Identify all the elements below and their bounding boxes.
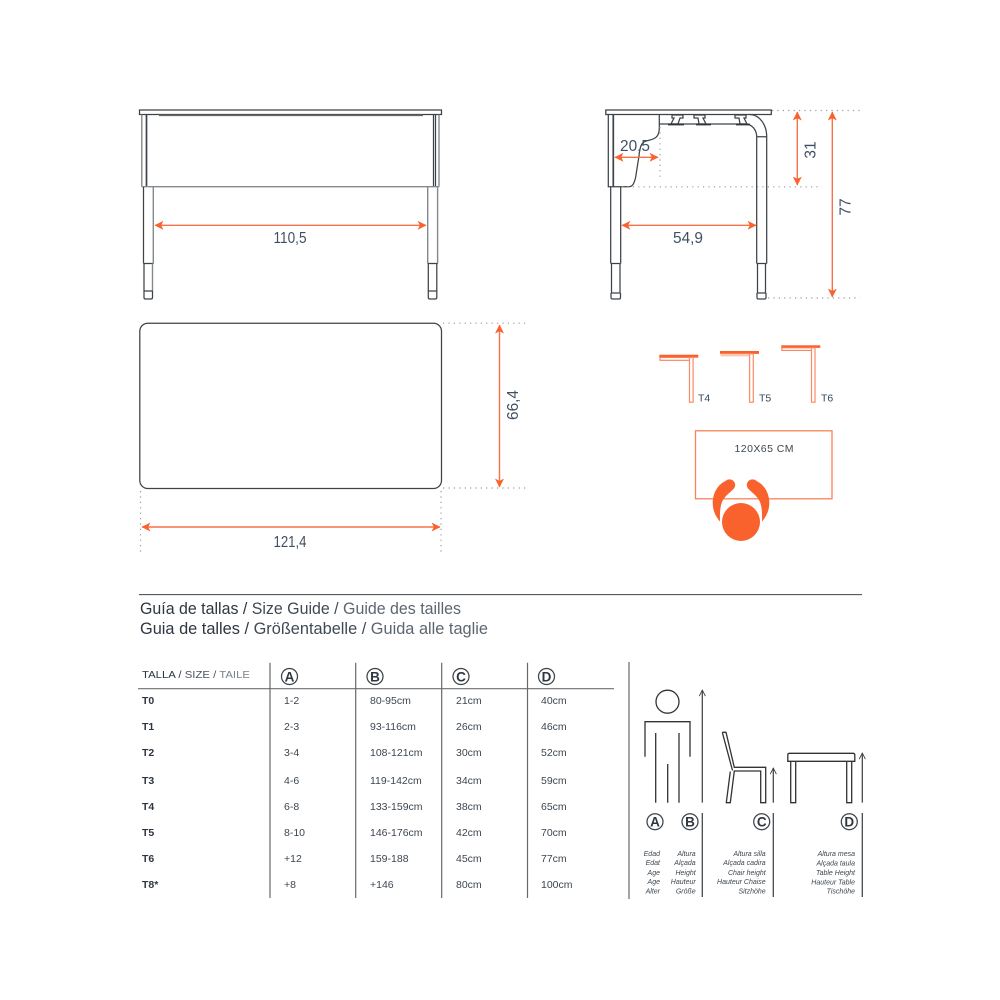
- side view of desk: 77: [838, 198, 854, 216]
- legend captions: Sitzhöhe: [738, 888, 766, 896]
- legend captions: Age: [647, 870, 660, 877]
- legend captions: Edad: [644, 851, 661, 858]
- letter badges: A: [650, 814, 660, 830]
- top view of desk: 66,4: [505, 390, 522, 420]
- legend captions: Altura silla: [732, 851, 766, 858]
- side view of desk: 31: [802, 141, 820, 159]
- legend captions: [644, 851, 856, 896]
- legend captions: Alçada cadira: [722, 860, 766, 867]
- legend captions: Hauteur Table: [811, 880, 855, 886]
- clamps: [668, 115, 750, 124]
- legend captions: Alçada: [673, 860, 696, 867]
- letter badges: B: [685, 814, 695, 830]
- table rows: 46cm: [541, 721, 567, 733]
- front view of desk: 110,5: [274, 230, 306, 247]
- table rows: 1-2: [284, 695, 299, 707]
- table rows: T8*: [142, 879, 159, 891]
- table rows: 4-6: [284, 775, 299, 787]
- table rows: 3-4: [284, 747, 299, 759]
- legend captions: Alter: [645, 888, 661, 896]
- orange desk size profiles T4 T5 T6: T5: [759, 392, 771, 404]
- icon: chair: [722, 732, 766, 803]
- table rows: 159-188: [370, 853, 409, 865]
- letter badges: D: [844, 814, 854, 830]
- table rows: 6-8: [284, 801, 299, 813]
- table rows: 93-116cm: [370, 721, 416, 733]
- arrow: chair height: [772, 768, 774, 803]
- letter badges: C: [757, 814, 767, 830]
- table rows: 77cm: [541, 853, 567, 865]
- table rows: +8: [284, 879, 296, 891]
- table rows: 52cm: [541, 747, 567, 759]
- table rows: T0: [142, 695, 154, 707]
- size table: [138, 663, 614, 898]
- size guide heading: [139, 595, 862, 638]
- desk footprint with seated user: 120X65 CM: [734, 443, 794, 455]
- table rows: 119-142cm: [370, 775, 422, 787]
- table header: [142, 668, 554, 684]
- measurement legend: [629, 662, 862, 899]
- front view of desk: [140, 110, 442, 299]
- table rows: 38cm: [456, 801, 482, 813]
- table rows: 2-3: [284, 721, 299, 733]
- legend captions: Table Height: [816, 870, 856, 877]
- table header: TALLA / SIZE / TAILE: [142, 669, 250, 681]
- arrow: table height: [861, 753, 863, 803]
- size guide heading: Guia de talles / Größentabelle / Guida alle taglie: [140, 620, 488, 638]
- legend captions: Altura: [676, 851, 696, 858]
- table rows: T2: [142, 747, 154, 759]
- side view of desk: [606, 110, 860, 299]
- legend captions: Alçada taula: [815, 860, 855, 868]
- orange desk size profiles T4 T5 T6: [659, 345, 833, 404]
- table rows: 80cm: [456, 879, 482, 891]
- letter badges: [647, 814, 857, 830]
- top view of desk: [140, 323, 528, 555]
- size guide heading: Guía de tallas / Size Guide / Guide des tailles: [140, 600, 461, 618]
- table rows: 40cm: [541, 695, 567, 707]
- legend captions: Größe: [676, 888, 696, 896]
- legend captions: Hauteur: [671, 879, 696, 886]
- table rows: 100cm: [541, 879, 573, 891]
- table header: C: [456, 669, 466, 684]
- table rows: +12: [284, 853, 302, 865]
- table rows: T4: [142, 801, 154, 813]
- table rows: 30cm: [456, 747, 482, 759]
- table rows: 34cm: [456, 775, 482, 787]
- table rows: 59cm: [541, 775, 567, 787]
- table rows: T5: [142, 827, 154, 839]
- table rows: 108-121cm: [370, 747, 423, 759]
- top view of desk: 121,4: [274, 534, 307, 551]
- side view of desk: 54,9: [673, 230, 703, 247]
- icon: person: [645, 690, 690, 803]
- arrow: height: [701, 690, 703, 803]
- legend captions: Altura mesa: [817, 851, 855, 858]
- table header: D: [542, 669, 552, 684]
- desk footprint with seated user: [696, 431, 832, 541]
- table rows: 8-10: [284, 827, 305, 839]
- table rows: T6: [142, 853, 154, 865]
- table rows: +146: [370, 879, 394, 891]
- orange desk size profiles T4 T5 T6: T6: [821, 392, 833, 404]
- legend captions: Edat: [646, 860, 661, 867]
- table rows: 45cm: [456, 853, 482, 865]
- table rows: 21cm: [456, 695, 482, 707]
- side view of desk: 20,5: [620, 138, 650, 155]
- legend captions: Hauteur Chaise: [717, 879, 766, 886]
- icon: person from above: [713, 479, 769, 541]
- icon: table: [788, 753, 855, 803]
- table rows: 146-176cm: [370, 827, 423, 839]
- table rows: 133-159cm: [370, 801, 423, 813]
- legend captions: Age: [647, 879, 660, 886]
- orange desk size profiles T4 T5 T6: T4: [698, 392, 710, 404]
- table rows: 80-95cm: [370, 695, 411, 707]
- table rows: 26cm: [456, 721, 482, 733]
- table rows: T1: [142, 721, 154, 733]
- table header: B: [370, 669, 380, 684]
- legend captions: Tischöhe: [827, 888, 855, 896]
- table header: A: [285, 669, 295, 684]
- legend captions: Chair height: [728, 870, 767, 877]
- table rows: 42cm: [456, 827, 482, 839]
- legend captions: Height: [675, 870, 697, 877]
- table rows: T3: [142, 775, 154, 787]
- table rows: [142, 695, 573, 891]
- table rows: 65cm: [541, 801, 567, 813]
- table rows: 70cm: [541, 827, 567, 839]
